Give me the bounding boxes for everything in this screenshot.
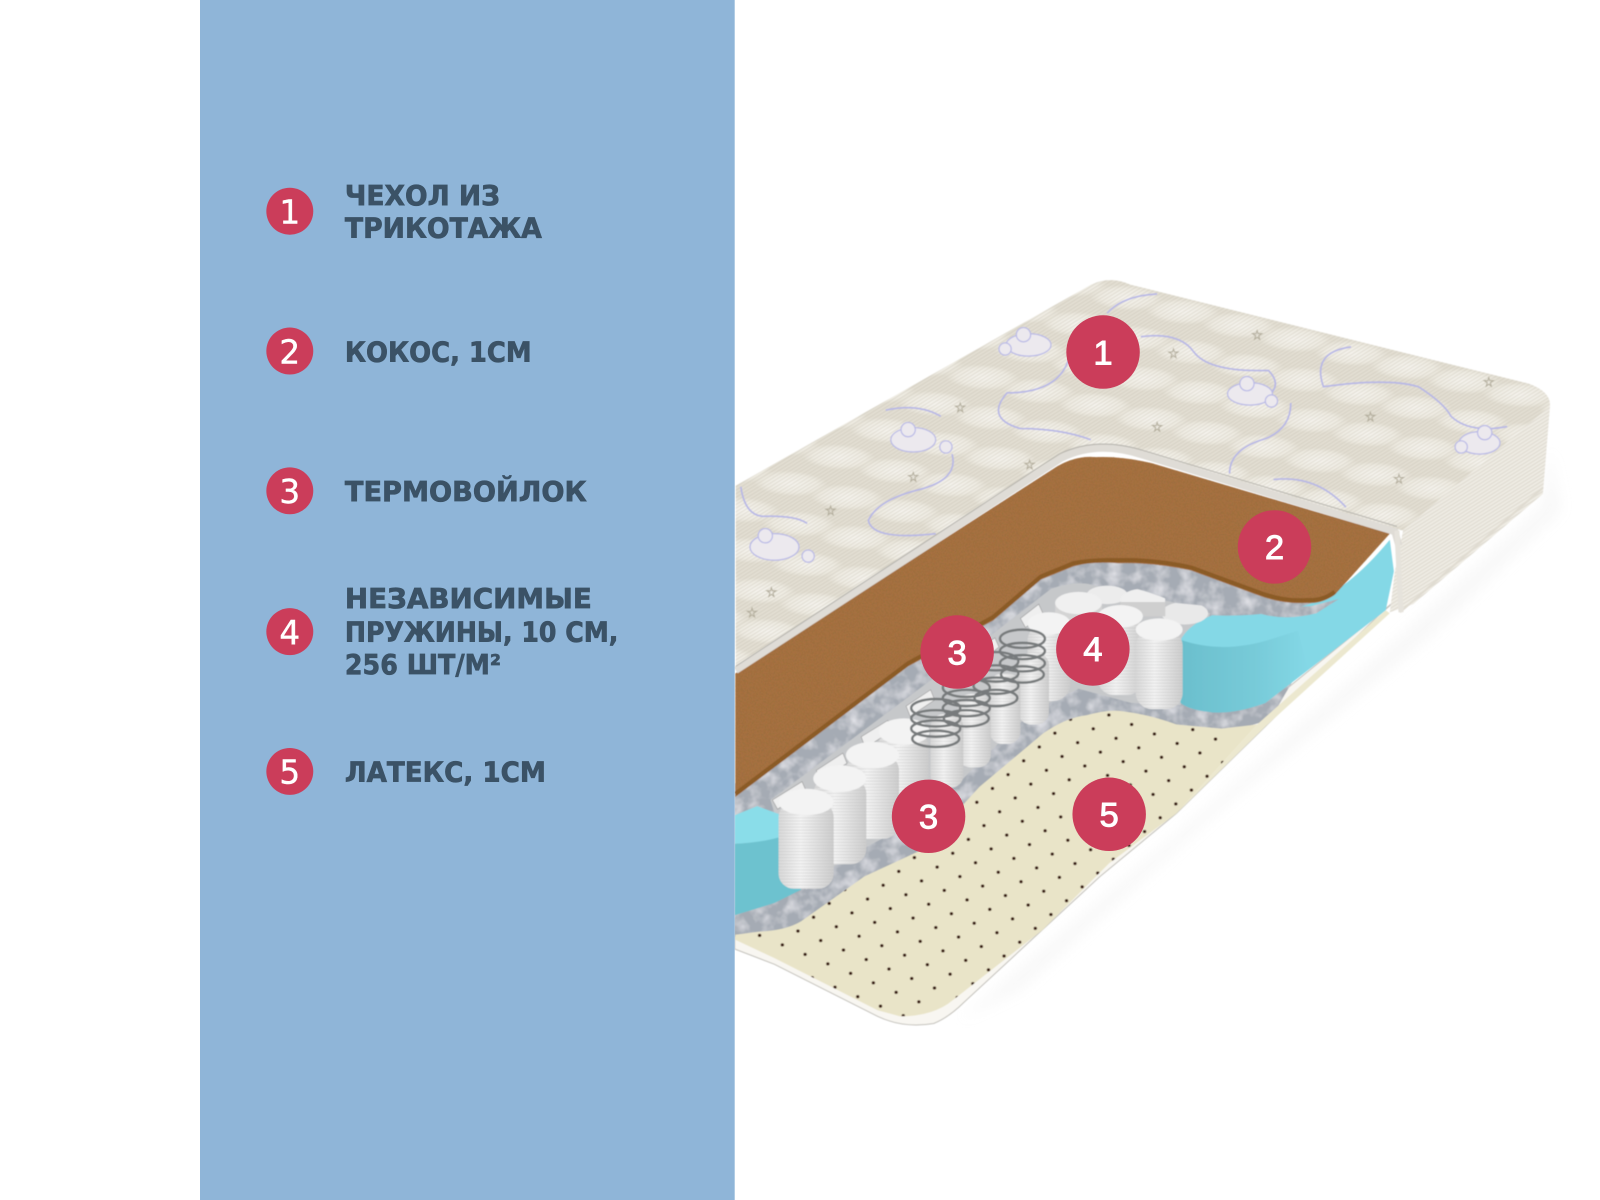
coconut layer — [735, 457, 1390, 797]
label 4 — [345, 583, 618, 681]
label 1: ТРИКОТАЖА — [345, 212, 542, 244]
badge 1 — [266, 188, 313, 235]
back row pocket discs — [1055, 586, 1208, 628]
label 1: ЧЕХОЛ ИЗ — [345, 180, 500, 212]
coconut dark lower edge — [735, 560, 1335, 794]
felt upper band — [734, 588, 1338, 791]
label 5: ЛАТЕКС, 1СМ — [345, 757, 546, 789]
badge 4 — [266, 608, 313, 655]
label 4: НЕЗАВИСИМЫЕ — [345, 583, 592, 615]
mattress marker 2 — [1238, 510, 1311, 584]
left blue panel — [200, 0, 735, 1200]
mattress marker 2: 2 — [1265, 529, 1284, 567]
badge 5: 5 — [279, 754, 300, 792]
mattress marker 3 lower — [892, 780, 965, 853]
fabric lavender print — [741, 294, 1507, 617]
mattress marker 5: 5 — [1100, 797, 1119, 835]
mattress marker 1: 1 — [1093, 334, 1113, 372]
bottom cover lip — [735, 597, 1400, 1025]
legend item 2 — [266, 328, 532, 374]
label 4: 256 ШТ/М² — [345, 649, 501, 681]
latex perforation holes — [757, 712, 1224, 1017]
mattress marker 3 upper: 3 — [947, 634, 967, 672]
cream latex side edge — [1177, 610, 1390, 813]
legend item 4 — [266, 583, 618, 681]
legend item 3 — [266, 467, 587, 514]
mattress marker 3 upper — [920, 615, 994, 689]
badge 4: 4 — [279, 614, 300, 652]
label 4: ПРУЖИНЫ, 10 СМ, — [345, 616, 618, 648]
foam front face — [1180, 639, 1276, 713]
bear motifs — [750, 328, 1500, 562]
latex layer — [735, 711, 1257, 1016]
foam top face — [734, 806, 780, 844]
star motifs — [747, 331, 1493, 617]
cover seam — [736, 448, 1399, 670]
mattress marker 4 — [1056, 612, 1130, 686]
foam top face — [1181, 540, 1394, 712]
foam front face — [735, 830, 801, 915]
badge 2 — [266, 328, 313, 374]
mattress marker 3 lower: 3 — [919, 799, 938, 837]
mattress marker 5 — [1072, 778, 1146, 851]
fabric side face — [1390, 406, 1550, 612]
legend item 1 — [266, 180, 542, 244]
thermal felt layer — [735, 557, 1342, 937]
badge 2: 2 — [279, 333, 300, 371]
left foam block — [735, 806, 801, 915]
badge 3 — [266, 467, 313, 514]
bare steel coils — [911, 630, 1045, 747]
badge 5 — [266, 748, 313, 795]
fabric side fold — [1400, 488, 1543, 612]
badge 3: 3 — [279, 473, 300, 511]
rear pocket strips — [772, 604, 1043, 809]
seam side edge — [1397, 531, 1401, 612]
fabric twill texture — [736, 280, 1550, 668]
spring well — [770, 583, 1210, 890]
soft ground shadow — [959, 449, 1561, 1020]
pocket springs — [779, 605, 1183, 889]
seam outline — [736, 444, 1397, 666]
label 1 — [345, 180, 542, 244]
mattress marker 1 — [1066, 315, 1140, 389]
fabric side texture — [1390, 406, 1550, 612]
label 2: КОКОС, 1СМ — [345, 337, 532, 369]
mattress illustration — [735, 280, 1561, 1025]
label 3: ТЕРМОВОЙЛОК — [345, 474, 587, 508]
fabric top face — [736, 280, 1550, 668]
legend item 5 — [266, 748, 546, 795]
right foam block — [1181, 540, 1394, 713]
mattress marker 4: 4 — [1083, 631, 1103, 669]
badge 1: 1 — [279, 193, 300, 231]
